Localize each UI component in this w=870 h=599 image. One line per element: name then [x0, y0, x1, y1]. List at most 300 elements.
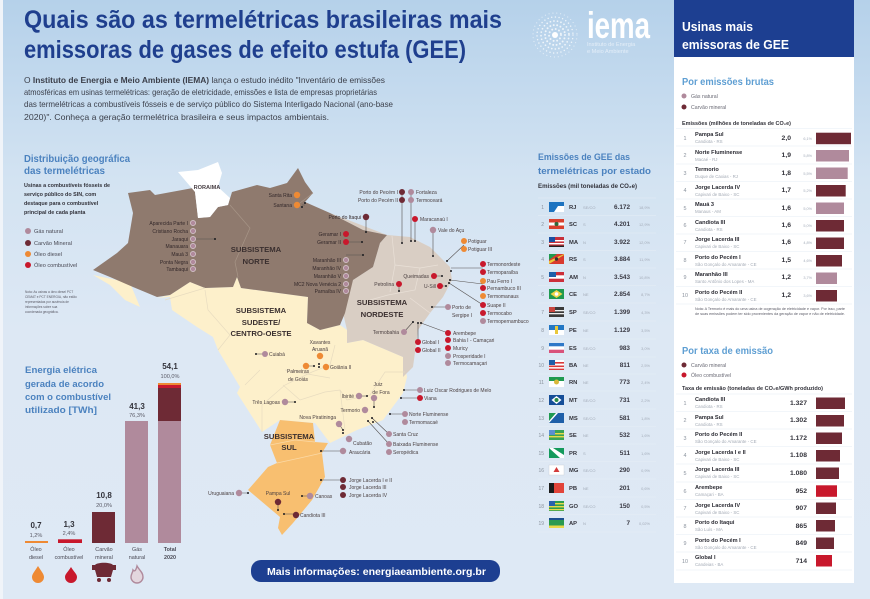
- rank 7: Jorge Lacerda III: [695, 237, 740, 243]
- row PR: PR: [569, 451, 578, 457]
- bar labels: Total: [164, 547, 177, 553]
- rate rank 3: [684, 432, 842, 444]
- plants: Sudeste e Centro-Oeste: Três Lagoas: [252, 400, 280, 406]
- rank 2: 2: [684, 153, 686, 159]
- plants: Sudeste e Centro-Oeste: Juiz: [374, 382, 383, 388]
- plants: Nordeste: Pau Ferro I: [487, 279, 512, 285]
- table heading: [538, 152, 651, 177]
- plants: Sudeste e Centro-Oeste: Termomacaé: [409, 420, 438, 426]
- rate rank 10: 714: [796, 558, 807, 565]
- row SP: 1.399: [614, 309, 630, 316]
- rate rank 8: 865: [796, 523, 807, 530]
- plants: Sudeste e Centro-Oeste: Ibirité: [342, 394, 354, 400]
- plants: Nordeste: Arembepe: [453, 331, 476, 337]
- rank 3: [684, 167, 848, 179]
- plants: Nordeste: Potiguar III: [468, 247, 492, 253]
- rate rank 5: Capivari de Baixo - SC: [695, 474, 739, 479]
- intro text: 2020)". Conheça a geração termelétrica brasileira e seus impactos ambientais.: [24, 113, 329, 122]
- row MS: 1,8%: [641, 416, 651, 421]
- rank 9: Maranhão III: [695, 272, 728, 278]
- chart heading: gerada de acordo: [25, 379, 104, 390]
- rate rank 5: 5: [684, 471, 686, 477]
- plants: Sudeste e Centro-Oeste: Cubatão: [353, 441, 372, 447]
- rate rank 2: Pampa Sul: [695, 415, 724, 421]
- plants: Nordeste: Petrolina: [374, 282, 394, 288]
- plants: Sudeste e Centro-Oeste: Norte Fluminense: [409, 412, 449, 418]
- rate rank 3: Porto do Pecém II: [695, 432, 743, 438]
- row ES: 3,0%: [641, 346, 651, 351]
- rate rank 7: Capivari de Baixo - SC: [695, 510, 739, 515]
- logo: IEMA: e Meio Ambiente: [587, 49, 629, 55]
- row RS: S: [583, 257, 586, 262]
- plants: Sul: [208, 448, 392, 519]
- plants: Norte: Jaraqui: [172, 237, 188, 243]
- title: emissoras de gases de efeito estufa (GEE): [24, 36, 466, 64]
- rate rank 6: [684, 485, 837, 497]
- row PB: PB: [569, 486, 577, 492]
- rank 3: Termorio: [695, 167, 719, 173]
- plants: Nordeste: Termoceará: [416, 198, 443, 204]
- plants: Norte: Santana: [273, 203, 292, 209]
- footnote: [695, 307, 845, 316]
- rate rank 7: [684, 502, 836, 515]
- row PB: [538, 483, 651, 493]
- row MS: 13: [538, 416, 544, 422]
- column title: Taxa de emissão (toneladas de CO₂e/GWh produzido): [682, 386, 823, 392]
- rank 5: 1,6: [782, 205, 791, 212]
- rate rank 5: 1.080: [790, 470, 807, 477]
- row AM: 10,8%: [639, 275, 651, 280]
- rank 8: 8: [684, 258, 686, 264]
- legend: emission rate: [682, 362, 731, 379]
- rate rank 7: 907: [796, 505, 807, 512]
- row BA: 10: [538, 363, 544, 369]
- bar labels: Carvão: [95, 547, 113, 553]
- plants: Sudeste e Centro-Oeste: Santa Cruz: [393, 432, 419, 438]
- subsystem labels: SUL: [281, 443, 297, 452]
- panel header: [674, 0, 854, 57]
- rank 5: 5: [684, 206, 686, 212]
- row ES: 983: [619, 345, 630, 352]
- map heading and legend: principal de cada planta: [24, 210, 86, 216]
- row ES: ES: [569, 346, 577, 352]
- row AP: N: [583, 521, 586, 526]
- row SP: 4,3%: [641, 310, 651, 315]
- plants: Nordeste: Global II: [422, 348, 441, 354]
- plants: Sudeste e Centro-Oeste: Termorio: [341, 408, 360, 414]
- rate rank 4: [684, 450, 840, 462]
- map heading and legend: CEMAT e PCT ENERGIA, não estão: [25, 295, 77, 299]
- rate rank 10: [682, 555, 832, 567]
- plants: Sudeste e Centro-Oeste: de Goiás: [288, 377, 309, 383]
- row PR: [538, 448, 651, 458]
- rank 6: [684, 220, 844, 232]
- subheading: emission rate: Por taxa de emissão: [682, 345, 773, 357]
- plants: Norte: MC2 Nova Venécia 2: [294, 282, 341, 288]
- bar values: 41,3: [129, 402, 145, 411]
- panel: top emitters: [674, 0, 854, 583]
- row SE: NE: [583, 433, 589, 438]
- plants: Nordeste: Termopernambuco: [487, 319, 529, 325]
- rank 6: Candiota III: [695, 220, 726, 226]
- bar labels: Gás: [132, 547, 142, 553]
- bar values: 76,3%: [129, 413, 145, 419]
- row BA: NE: [583, 363, 589, 368]
- rank 7: 4,8%: [803, 241, 813, 245]
- rank 5: 5,0%: [803, 207, 813, 211]
- logo: IEMA: Instituto de Energia: [587, 42, 636, 48]
- rate rank 3: São Gonçalo do Amarante - CE: [695, 439, 757, 444]
- subsystem labels: SUDESTE/: [242, 318, 281, 327]
- rank 7: Capivari de Baixo - SC: [695, 244, 739, 249]
- bar labels: combustível: [55, 555, 83, 561]
- row MG: 290: [619, 467, 630, 474]
- plants: Nordeste: Termobahia: [373, 330, 399, 336]
- region: Subsistema Sul: [248, 420, 328, 535]
- row AP: 7: [626, 520, 630, 527]
- footnote: Nota: A Termorio é mais do uma usina de cogeração de eletricidade e vapor. Por isso, parte: [695, 307, 845, 311]
- row SE: 1,6%: [641, 433, 651, 438]
- row RS: [541, 254, 651, 264]
- rate rank 8: 8: [684, 524, 686, 530]
- plants: Sudeste e Centro-Oeste: Viana: [424, 396, 437, 402]
- row MG: 16: [538, 468, 544, 474]
- bar values: 1,3: [63, 520, 75, 529]
- row MG: SE/CO: [583, 468, 595, 473]
- legend: gross emissions: Gás natural: [691, 94, 718, 100]
- rank 9: 9: [684, 275, 686, 281]
- plants: Nordeste: Porto do Pecém II: [358, 198, 398, 204]
- plants: Nordeste: Termocabo: [487, 311, 512, 317]
- plants: Nordeste: Vale do Açu: [438, 228, 465, 234]
- plants: Sudeste e Centro-Oeste: Aruanã: [312, 347, 328, 353]
- plants: Nordeste: Termonordeste: [487, 262, 521, 268]
- row CE: 8,7%: [641, 292, 651, 297]
- row GO: 150: [619, 503, 630, 510]
- row RS: 3.884: [614, 256, 630, 263]
- rank 6: 1,6: [782, 222, 791, 229]
- more info button: Mais informações: energiaeambiente.org.br: [267, 566, 486, 578]
- plants: Norte: Geramar I: [318, 232, 341, 238]
- row SE: 14: [538, 433, 544, 439]
- rate rank 6: Camaçari - BA: [695, 492, 724, 497]
- rate rank 9: [684, 538, 834, 550]
- plants: Sudeste e Centro-Oeste: Goiânia II: [330, 365, 351, 371]
- bar values: 20,0%: [96, 503, 112, 509]
- row AM: N: [583, 275, 586, 280]
- region: Subsistema Nordeste: [330, 213, 452, 377]
- plants: Sudeste e Centro-Oeste: Luiz Oscar Rodrigues de Melo: [424, 388, 491, 394]
- row MT: MT: [569, 398, 578, 404]
- intro text: O Instituto de Energia e Meio Ambiente (IEMA) lança o estudo inédito "Inventário de emissões: [24, 76, 385, 85]
- plants: Sudeste e Centro-Oeste: Palmeiras: [287, 369, 310, 375]
- row CE: [541, 289, 651, 299]
- row RJ: SE/CO: [583, 205, 595, 210]
- bar values: 54,1: [162, 362, 178, 371]
- plants: Sul: Jorge Lacerda IV: [349, 493, 388, 499]
- row MA: MA: [569, 240, 579, 246]
- table heading: Emissões de GEE das: [538, 152, 630, 163]
- row MA: 3: [541, 240, 544, 246]
- icon: diesel drop: [32, 566, 44, 583]
- bar chart: energy by fuel: [25, 362, 181, 583]
- panel header: emissoras de GEE: [682, 38, 789, 52]
- row ES: SE/CO: [583, 346, 595, 351]
- row BA: 2,5%: [641, 363, 651, 368]
- plants: Nordeste: Potiguar: [468, 239, 487, 245]
- intro text: atmosféricas em usinas termelétricas: geração de eletricidade, emissões e lista de empresas proprietárias: [24, 88, 377, 97]
- row PR: 1,6%: [641, 451, 651, 456]
- rank 10: 10: [682, 293, 688, 299]
- rank 1: 6,1%: [803, 137, 813, 141]
- rate rank 5: [684, 467, 839, 479]
- row SE: 532: [619, 432, 630, 439]
- plants: Norte: Mauá 3: [171, 252, 188, 258]
- states emissions table: [538, 152, 656, 532]
- more info button: [251, 560, 500, 582]
- bars: [25, 383, 181, 543]
- rate rank 3: 1.172: [790, 435, 807, 442]
- row PB: 201: [619, 485, 630, 492]
- plants: Norte: Cristiano Rocha: [152, 229, 188, 235]
- plants: Nordeste: Queimadas: [403, 274, 429, 280]
- rank 2: Norte Fluminense: [695, 150, 742, 156]
- row SP: 7: [541, 310, 544, 316]
- row SC: [541, 219, 651, 229]
- row GO: GO: [569, 504, 579, 510]
- plants: Sul: Jorge Lacerda I e II: [349, 478, 392, 484]
- title: [24, 6, 502, 64]
- icon: gas flame: [131, 566, 143, 583]
- rank 4: Jorge Lacerda IV: [695, 185, 740, 191]
- row AM: 5: [541, 275, 544, 281]
- row AP: 19: [538, 521, 544, 527]
- row AM: 3.543: [614, 274, 630, 281]
- plants: Sudeste e Centro-Oeste: [252, 340, 491, 456]
- row MG: 0,9%: [641, 468, 651, 473]
- plants: Norte: Maranhão III: [313, 258, 341, 264]
- row CE: 2.854: [614, 291, 630, 298]
- legend: gross emissions: [682, 94, 726, 111]
- subheading: gross emissions: Por emissões brutas: [682, 76, 774, 88]
- plants: Norte: Tambaqui: [166, 267, 188, 273]
- rank 9: 3,7%: [803, 276, 813, 280]
- rate rank 1: Candiota - RS: [695, 404, 723, 409]
- table heading: termelétricas por estado: [538, 166, 651, 177]
- row CE: CE: [569, 292, 577, 298]
- rate rank 5: Jorge Lacerda III: [695, 467, 740, 473]
- rank 1: 2,0: [782, 135, 791, 142]
- plants: Nordeste: Fortaleza: [416, 190, 437, 196]
- rank 8: São Gonçalo do Amarante - CE: [695, 262, 757, 267]
- row MT: 2,2%: [641, 398, 651, 403]
- row SP: SE/CO: [583, 310, 595, 315]
- row MT: [538, 395, 651, 405]
- rate rank 10: 10: [682, 559, 688, 565]
- rate rank 1: 1.327: [790, 400, 807, 407]
- footnote: de suas emissões podem ter sido provenientes da geração de vapor e não de eletricidade.: [695, 312, 845, 316]
- map heading and legend: Óleo combustível: [34, 262, 77, 269]
- rank 4: Capivari de Baixo - SC: [695, 192, 739, 197]
- rank 6: 5,0%: [803, 224, 813, 228]
- row AP: 0,02%: [639, 521, 651, 526]
- rank 3: 1,8: [782, 170, 791, 177]
- row AP: AP: [569, 521, 577, 527]
- rate rank 4: Jorge Lacerda I e II: [695, 450, 746, 456]
- rank 8: [684, 255, 842, 267]
- row PE: NE: [583, 328, 589, 333]
- rate rank 9: 849: [796, 540, 807, 547]
- rate rank 1: Candiota III: [695, 397, 726, 403]
- map heading and legend: [24, 154, 130, 314]
- icon: fuel oil drop: [65, 567, 77, 583]
- panel header: Usinas mais: [682, 20, 753, 34]
- row MT: SE/CO: [583, 398, 595, 403]
- row MS: MS: [569, 416, 578, 422]
- row SE: SE: [569, 433, 577, 439]
- rate rank 8: Porto do Itaqui: [695, 520, 735, 526]
- row PE: 8: [541, 328, 544, 334]
- rank 6: 6: [684, 223, 686, 229]
- row SE: [538, 430, 651, 440]
- intro text: [24, 76, 393, 122]
- row CE: NE: [583, 292, 589, 297]
- connector dots: [214, 202, 452, 515]
- subsystem labels: NORTE: [243, 257, 269, 266]
- row PE: 3,5%: [641, 328, 651, 333]
- row MA: 3.922: [614, 239, 630, 246]
- region: Subsistema Sudeste/Centro-Oeste: [93, 275, 407, 443]
- rank 4: 5,2%: [803, 189, 813, 193]
- plants: Nordeste: Prosperidade I: [453, 354, 486, 360]
- rank 1: Pampa Sul: [695, 132, 724, 138]
- plants: Nordeste: U-Sill: [424, 284, 436, 290]
- bar values: 10,8: [96, 491, 112, 500]
- rate rank 2: Candiota - RS: [695, 422, 723, 427]
- row MS: 581: [619, 415, 630, 422]
- rank 9: [684, 272, 837, 284]
- plants: Nordeste: Muricy: [453, 346, 468, 352]
- row PB: 0,6%: [641, 486, 651, 491]
- row RN: 11: [539, 380, 544, 386]
- rate rank 6: 6: [684, 489, 686, 495]
- row RN: [539, 377, 651, 387]
- column title: Emissões (milhões de toneladas de CO₂e): [682, 121, 791, 127]
- rate rank 6: Arembepe: [695, 485, 722, 491]
- rank 10: Porto do Pecém II: [695, 290, 743, 296]
- row GO: 18: [538, 504, 544, 510]
- row MG: MG: [569, 468, 579, 474]
- rank 3: 3: [684, 171, 686, 177]
- rate rank 7: Jorge Lacerda IV: [695, 503, 740, 509]
- row MG: [538, 465, 651, 475]
- legend: gross emissions: Carvão mineral: [691, 105, 726, 111]
- plants: Nordeste: Porto de: [452, 305, 471, 311]
- plants: Nordeste: Suape II: [487, 303, 506, 309]
- map heading and legend: representadas por ausência de: [25, 300, 69, 304]
- rank 3: Duque de Caxias - RJ: [695, 174, 738, 179]
- map heading and legend: coordenada geográfica.: [25, 310, 59, 314]
- row MS: SE/CO: [583, 416, 595, 421]
- rank 9: 1,2: [782, 274, 791, 281]
- bar labels: diesel: [29, 555, 43, 561]
- chart heading: [25, 365, 111, 416]
- rank 5: Mauá 3: [695, 202, 714, 208]
- plants: Nordeste: Porto do Pecém I: [359, 190, 398, 196]
- title: Quais são as termelétricas brasileiras mais: [24, 6, 502, 34]
- connector lines: [193, 192, 483, 514]
- bar labels: Óleo: [30, 546, 42, 553]
- plants: Nordeste: [358, 189, 529, 367]
- row SC: 4.201: [614, 221, 630, 228]
- bar values: 2,4%: [63, 531, 75, 537]
- rate rank 9: 9: [684, 541, 686, 547]
- row AM: AM: [569, 275, 578, 281]
- row RS: 11,9%: [639, 257, 651, 262]
- plants: Nordeste: Sergipe I: [452, 313, 472, 319]
- subsystem labels: NORDESTE: [361, 310, 403, 319]
- rank 10: São Gonçalo do Amarante - CE: [695, 297, 757, 302]
- plants: Norte: Maranhão V: [314, 274, 342, 280]
- rate rank 4: 4: [684, 453, 686, 459]
- intro text: das termelétricas a combustíveis fósseis e de serviço público do Sistema Interligado Nacional (ano-base: [24, 100, 393, 109]
- rank 7: 7: [684, 240, 686, 246]
- rate rank 6: 952: [796, 488, 807, 495]
- bar values: [30, 362, 180, 539]
- legend: emission rate: Óleo combustível: [691, 372, 731, 379]
- row RN: 773: [619, 379, 630, 386]
- subsystem labels: SUBSISTEMA: [264, 432, 315, 441]
- row PB: 17: [538, 486, 544, 492]
- rank 2: 1,9: [782, 152, 791, 159]
- plants: Sudeste e Centro-Oeste: Xavantes: [310, 340, 331, 346]
- row CE: 6: [541, 292, 544, 298]
- row RN: 2,4%: [641, 380, 651, 385]
- plants: Norte: [149, 192, 369, 295]
- plants: Sul: Pampa Sul: [266, 491, 290, 497]
- legend: emission rate: Carvão mineral: [691, 363, 726, 369]
- plants: Nordeste: Global I: [422, 340, 439, 346]
- subsystem labels: CENTRO-OESTE: [230, 329, 292, 338]
- bar values: 1,2%: [30, 533, 42, 539]
- rank 7: [684, 237, 844, 249]
- subsystem labels: [194, 185, 408, 452]
- plants: Sudeste e Centro-Oeste: Cuiabá: [269, 352, 285, 358]
- map heading and legend: Carvão Mineral: [34, 241, 72, 247]
- plants: Sudeste e Centro-Oeste: Nova Piratininga: [299, 415, 336, 421]
- row MS: [538, 413, 651, 423]
- rank 10: 1,2: [782, 292, 791, 299]
- rate rank 8: São Luís - MA: [695, 527, 723, 532]
- rank 8: Porto do Pecém I: [695, 255, 741, 261]
- chart heading: Energia elétrica: [25, 365, 98, 376]
- map heading and legend: das termelétricas: [24, 166, 105, 177]
- map heading and legend: Gás natural: [34, 229, 63, 235]
- row PB: NE: [583, 486, 589, 491]
- row RN: NE: [583, 380, 589, 385]
- row MT: 12: [538, 398, 544, 404]
- row PE: 1.129: [614, 327, 630, 334]
- bar labels: [29, 546, 177, 561]
- bar labels: 2020: [164, 555, 176, 561]
- rank 1: 1: [684, 136, 686, 142]
- map of Brazil: [93, 162, 529, 535]
- plants: Sudeste e Centro-Oeste: Seropédica: [393, 450, 419, 456]
- rank 2: [684, 150, 849, 162]
- rank 8: 1,5: [782, 257, 791, 264]
- rate rank 3: 3: [684, 436, 686, 442]
- row MA: [541, 237, 651, 247]
